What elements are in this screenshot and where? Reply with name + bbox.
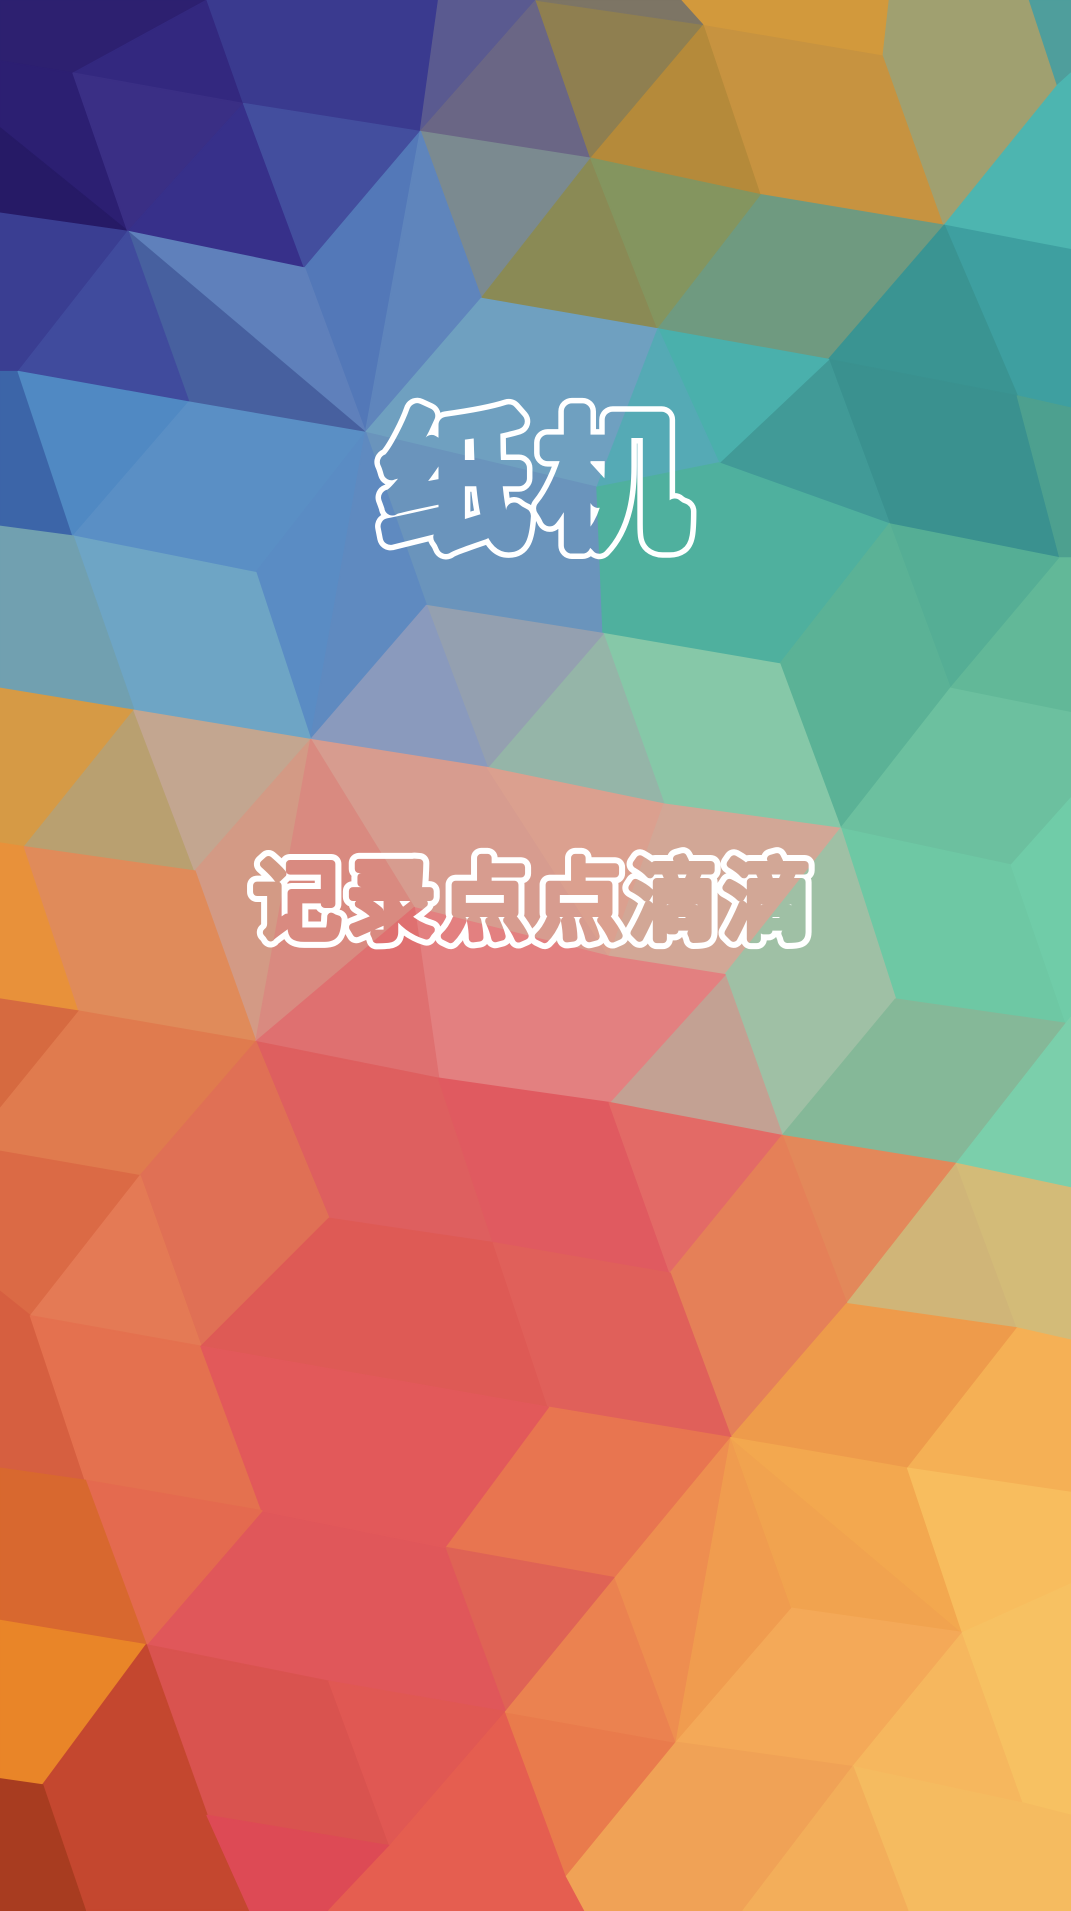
title: 纸机: 纸机 (382, 402, 698, 565)
subtitle: 记录点点滴滴: 记录点点滴滴 (253, 852, 817, 951)
